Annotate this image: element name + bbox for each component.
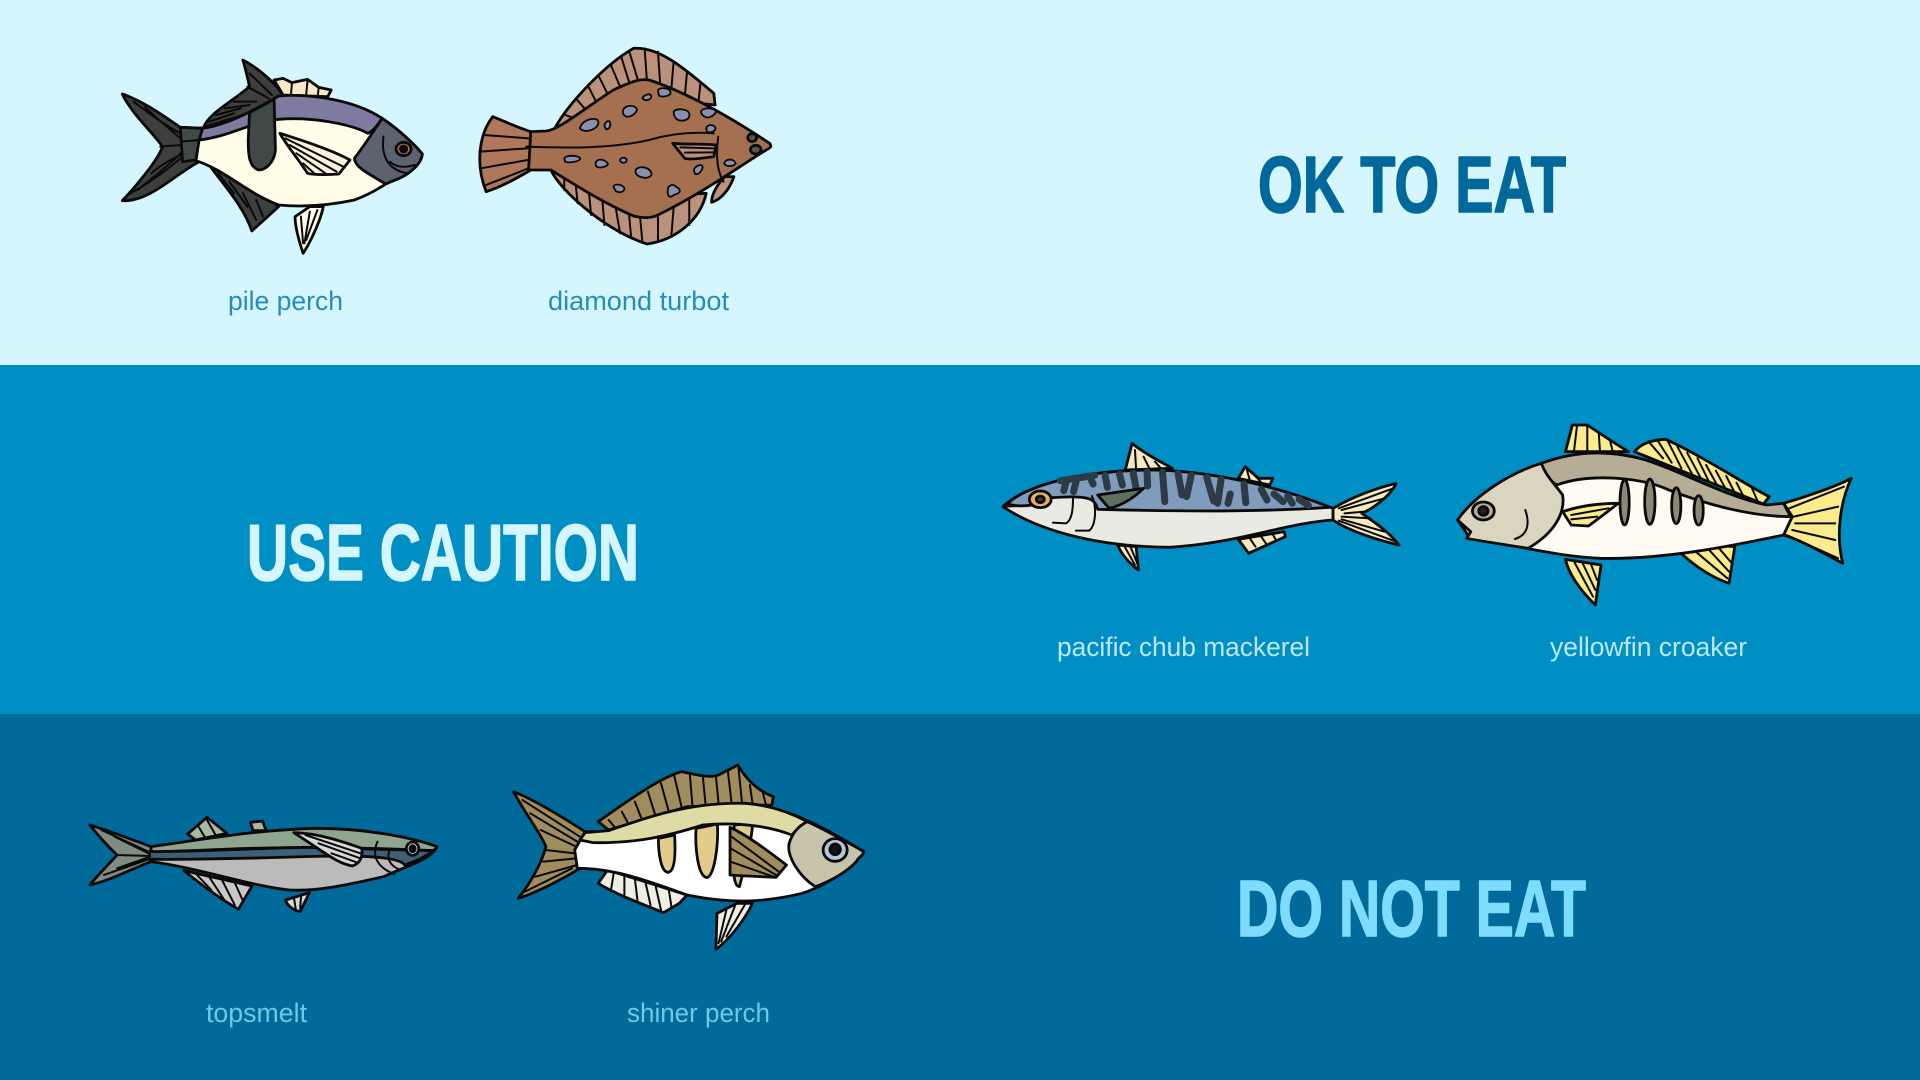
back stripes	[1060, 472, 1308, 505]
heading: use caution: USE CAUTION	[247, 508, 639, 597]
label: pacific chub mackerel: pacific chub mackerel	[1057, 632, 1310, 662]
label: diamond turbot: diamond turbot	[548, 286, 729, 316]
heading: ok to eat: OK TO EAT	[1258, 140, 1566, 229]
icon: pacific chub mackerel fish	[1003, 443, 1399, 570]
icon: diamond turbot fish	[479, 48, 771, 244]
icon: pile perch fish	[122, 60, 422, 253]
body	[529, 80, 771, 218]
head	[354, 118, 422, 184]
body	[151, 828, 437, 890]
heading: do not eat: DO NOT EAT	[1237, 864, 1586, 953]
body	[575, 803, 864, 901]
label: pile perch: pile perch	[228, 286, 343, 316]
yellow bars	[658, 823, 753, 887]
label: topsmelt: topsmelt	[206, 998, 307, 1028]
panel: do not eat	[0, 714, 1920, 1080]
body	[196, 96, 422, 206]
body	[1003, 470, 1333, 547]
purple back	[199, 95, 382, 140]
icon: shiner perch fish	[514, 765, 864, 949]
label: yellowfin croaker: yellowfin croaker	[1550, 632, 1747, 662]
icon: yellowfin croaker fish	[1458, 425, 1851, 605]
body	[1458, 453, 1792, 558]
bars	[1620, 479, 1703, 525]
icon: topsmelt fish	[90, 817, 437, 912]
panel: use caution	[0, 365, 1920, 715]
label: shiner perch: shiner perch	[627, 998, 770, 1028]
panel: ok to eat	[0, 0, 1920, 365]
spots	[564, 88, 736, 197]
